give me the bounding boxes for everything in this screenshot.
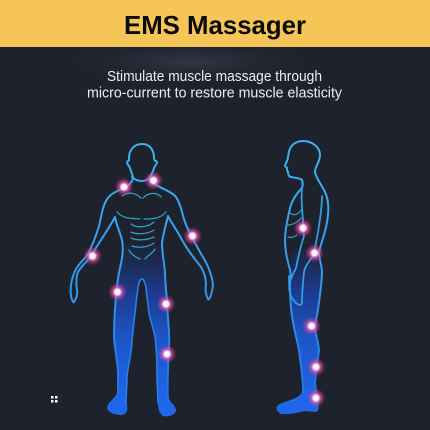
subtitle text [87, 69, 343, 102]
side body fill [277, 250, 323, 413]
massage points: front [83, 171, 202, 364]
front inner leg outline [126, 279, 158, 405]
front body outline right side [132, 144, 213, 415]
title banner [0, 0, 430, 47]
side body figure [277, 141, 328, 413]
front body outline [71, 144, 142, 414]
subtitle text: micro-current to restore muscle elasticity [87, 86, 343, 102]
side arm outline [289, 187, 322, 305]
side muscle lines [288, 209, 302, 237]
title banner: EMS Massager [124, 10, 306, 40]
subtitle text: Stimulate muscle massage through [107, 69, 322, 85]
front body figure [71, 144, 213, 415]
front muscle lines [117, 193, 166, 259]
massage points: side [294, 218, 326, 408]
side body outline [277, 141, 328, 413]
icon: small grid [51, 396, 58, 402]
front body fill [108, 245, 175, 415]
